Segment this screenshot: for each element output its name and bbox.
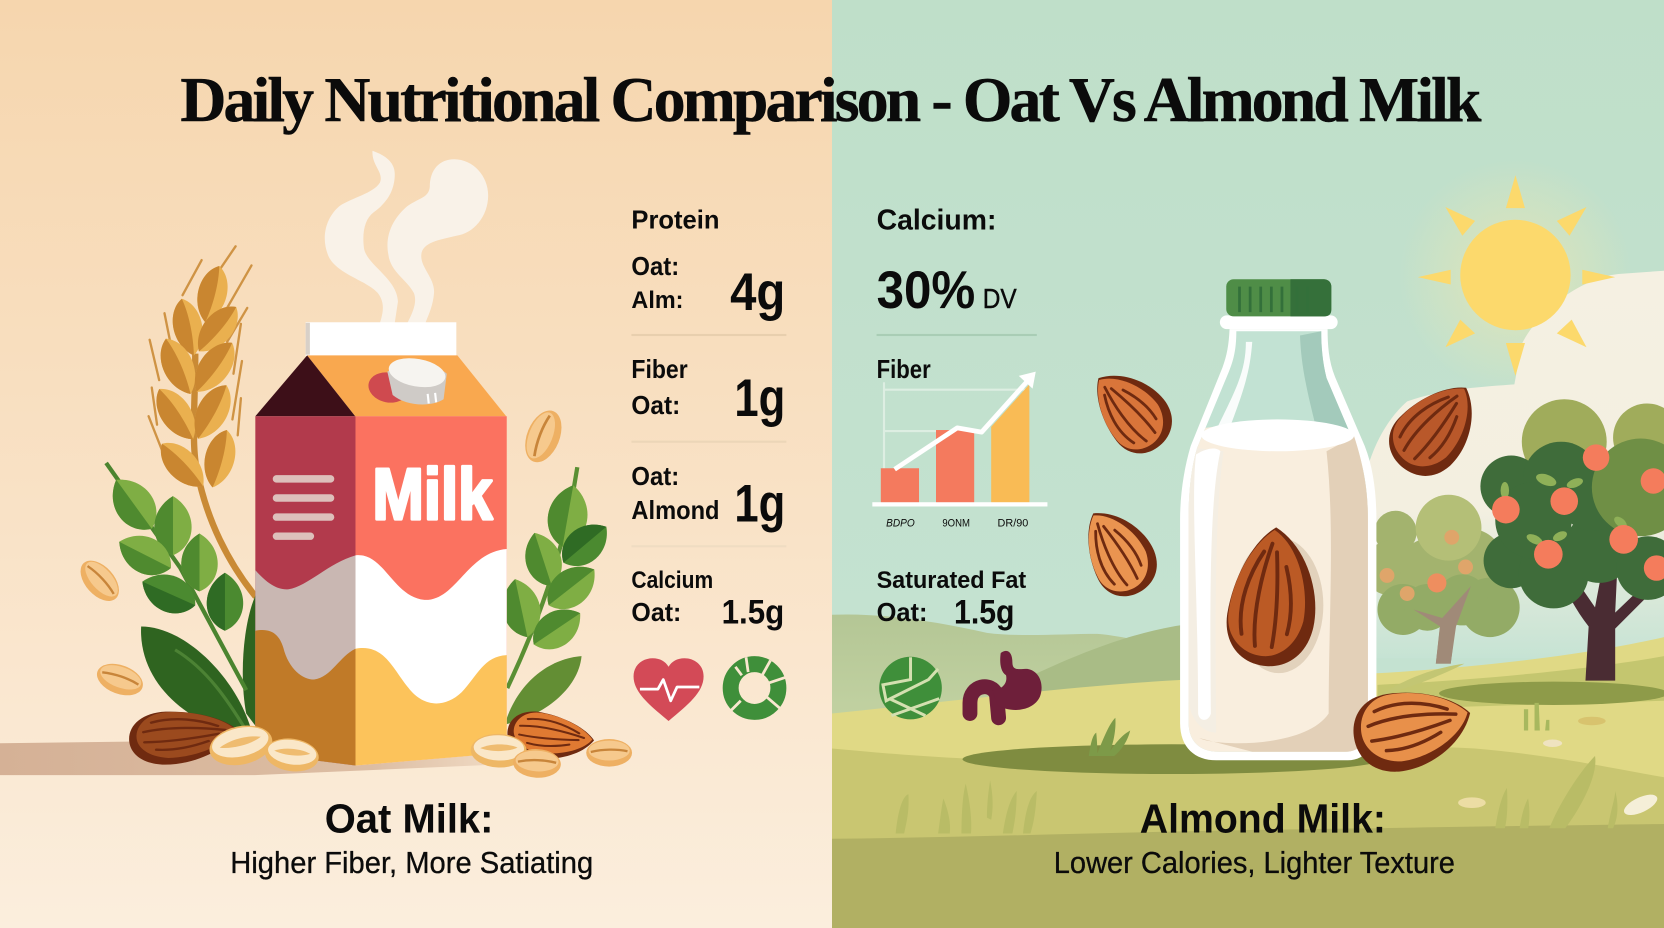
oat column: protein row: Protein (631, 206, 720, 234)
caption: almond milk: Almond Milk: (1140, 795, 1386, 841)
icon: green crossed circle (879, 657, 942, 719)
oat column: almond row: 1g (734, 474, 785, 533)
chart: fiber bars with arrow: BDPO (886, 518, 915, 530)
oat column: calcium row (631, 567, 784, 631)
oat column: fiber row: Oat: (631, 392, 680, 420)
almond column: saturated fat: 1.5g (954, 593, 1015, 631)
almond column: calcium: Calcium: (877, 204, 996, 236)
illustration: large fruit tree (1480, 399, 1664, 681)
almond column: saturated fat: Oat: (877, 599, 928, 627)
oat column: calcium row: Calcium (631, 567, 713, 594)
illustration: right leafy branch (497, 467, 618, 724)
caption: oat milk: Higher Fiber, More Satiating (230, 845, 593, 880)
almond column: fiber heading: Fiber (877, 356, 931, 384)
almond column: calcium (877, 204, 1017, 320)
illustration: seeds and almonds around carton (73, 405, 632, 779)
chart: fiber bars with arrow: 9ONM (942, 518, 970, 530)
illustration: milk carton (255, 322, 507, 766)
panel: oat milk background (0, 0, 832, 928)
chart: fiber bars with arrow (872, 372, 1047, 530)
title: Daily Nutritional Comparison - Oat Vs Almond Milk (180, 64, 1482, 135)
illustration: ground shadow under carton (0, 740, 531, 775)
illustration: wheat stalk (147, 246, 256, 597)
illustration: milk bottle (1180, 279, 1376, 760)
icon: heart with pulse (634, 658, 704, 721)
illustration: sun (1418, 175, 1615, 376)
icon: green ring (730, 657, 785, 712)
illustration: left leafy branch (101, 463, 256, 735)
almond column: calcium: DV (983, 283, 1017, 314)
almond column: calcium: 30% (877, 261, 975, 320)
oat column: almond row: Almond (631, 497, 720, 525)
oat column: protein row: Oat: (631, 253, 679, 281)
illustration: small orchard tree (1364, 495, 1520, 664)
oat column: fiber row: Fiber (631, 356, 688, 384)
illustration: flying almonds (1067, 356, 1495, 781)
almond column: saturated fat: Saturated Fat (877, 567, 1026, 594)
caption: oat milk (230, 795, 593, 880)
caption: oat milk: Oat Milk: (325, 795, 493, 841)
illustration: grass and pebbles (896, 703, 1660, 834)
chart: fiber bars with arrow: DR/90 (998, 518, 1028, 530)
oat column: protein row: 4g (730, 263, 785, 322)
oat column: protein row: Alm: (631, 287, 683, 314)
illustration: steam (325, 151, 488, 323)
oat column: almond row (631, 463, 785, 533)
caption: almond milk (1054, 795, 1455, 880)
icon: stomach (970, 651, 1042, 718)
oat column: calcium row: 1.5g (722, 593, 784, 631)
oat column: calcium row: Oat: (631, 599, 681, 627)
oat column: fiber row (631, 356, 785, 428)
oat column: almond row: Oat: (631, 463, 679, 491)
caption: almond milk: Lower Calories, Lighter Texture (1054, 845, 1455, 880)
almond column: saturated fat (877, 567, 1026, 631)
panel: almond milk background (832, 0, 1664, 928)
illustration: milk carton: Milk (372, 455, 493, 535)
oat column: fiber row: 1g (734, 369, 785, 428)
oat column: protein row (631, 206, 785, 322)
